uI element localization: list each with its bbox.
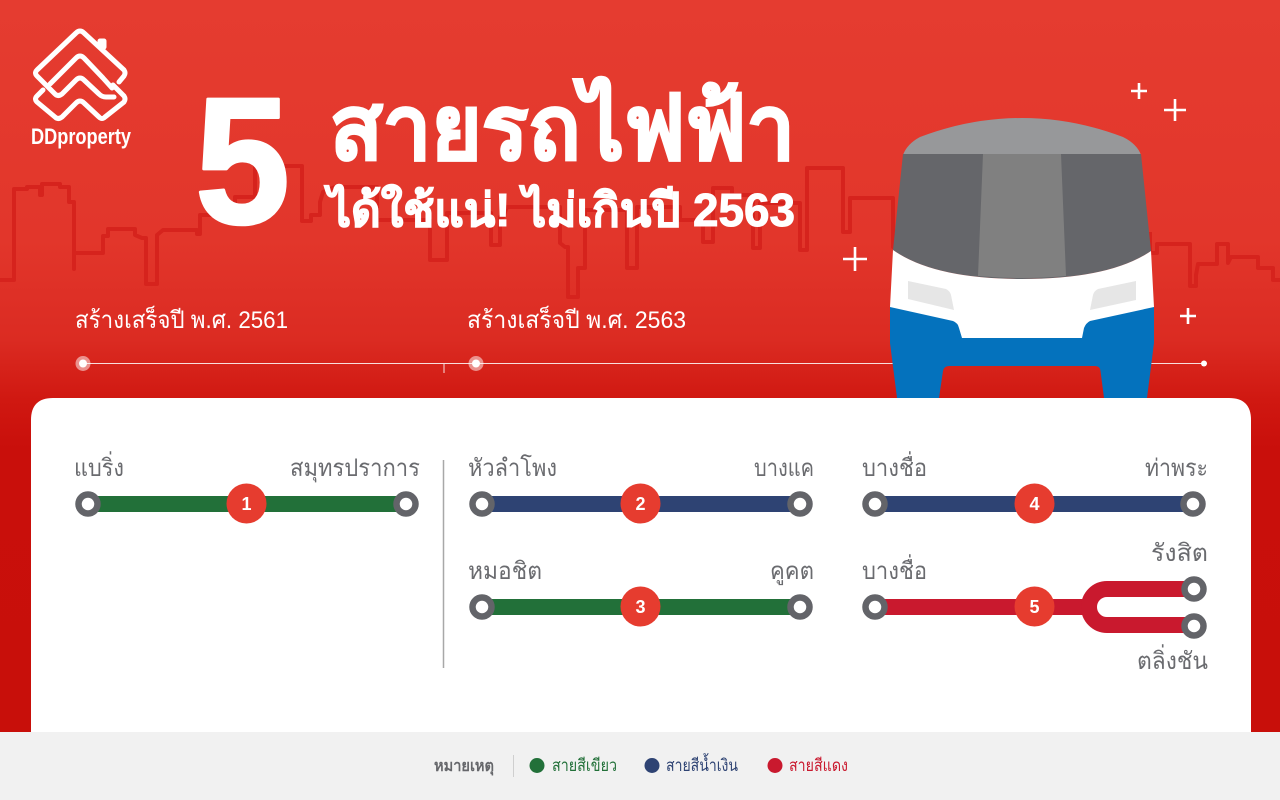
legend title: หมายเหตุ [434, 758, 494, 776]
station labels [862, 451, 1208, 482]
logo mark [36, 31, 125, 118]
timeline [76, 356, 1207, 373]
legend: blue: สายสีน้ำเงิน [666, 753, 738, 775]
station labels: หัวลำโพง [468, 454, 557, 482]
station labels [862, 540, 1208, 675]
end stations [472, 598, 810, 616]
station labels: บางชื่อ [862, 451, 927, 482]
legend bar [0, 732, 1280, 800]
badge 5 [1014, 586, 1054, 626]
line bar [88, 496, 406, 512]
train roof [903, 118, 1141, 155]
train windshield [893, 154, 1151, 279]
label: completed 2563: สร้างเสร็จปี พ.ศ. 2563 [467, 305, 686, 334]
station labels [74, 451, 420, 483]
timeline point 2563 [468, 356, 484, 371]
icon: DDproperty logo [31, 31, 132, 149]
badge 3 [620, 586, 660, 626]
route 3 [468, 558, 814, 626]
badge 1: 1 [241, 494, 252, 514]
legend: red [768, 756, 848, 775]
badge 2: 2 [635, 494, 646, 514]
badge 3: 3 [635, 597, 646, 617]
big number 5: 5 [195, 61, 290, 262]
station labels: คูคต [770, 558, 814, 586]
label: completed 2561: สร้างเสร็จปี พ.ศ. 2561 [75, 305, 288, 334]
route 1 [74, 451, 420, 524]
title line 1: สายรถไฟฟ้า [330, 77, 795, 179]
train blue lower body [890, 307, 1154, 398]
badge 4: 4 [1029, 494, 1040, 514]
route 4 [862, 451, 1208, 524]
timeline end point [1201, 360, 1207, 366]
badge 4 [1014, 484, 1054, 524]
train white body [890, 250, 1154, 340]
line bar [482, 496, 800, 512]
station labels: ท่าพระ [1145, 455, 1208, 482]
divider [442, 460, 444, 668]
station labels: สมุทรปราการ [290, 455, 420, 483]
forked line [875, 589, 1194, 625]
route 2 [468, 454, 814, 524]
station labels: บางชื่อ [862, 554, 927, 585]
station labels: บางแค [754, 455, 814, 482]
legend separator [512, 755, 514, 777]
title [323, 77, 795, 236]
end stations [866, 494, 1202, 514]
windshield centre panel [978, 154, 1066, 278]
logo wordmark: DDproperty [31, 124, 132, 149]
panel: route card [31, 398, 1251, 732]
station labels [468, 558, 814, 586]
badge 5: 5 [1029, 597, 1040, 617]
station labels [468, 454, 814, 482]
station labels: หมอชิต [468, 558, 542, 585]
title line 2: ได้ใช้แน่! ไม่เกินปี 2563 [323, 183, 795, 236]
station labels: ตลิ่งชัน [1137, 644, 1208, 675]
end stations [78, 494, 416, 514]
badge 1 [226, 484, 266, 524]
line bar [875, 496, 1193, 512]
legend: green [530, 756, 617, 775]
city skyline outline [0, 166, 1280, 297]
station labels: รังสิต [1151, 540, 1208, 567]
timeline point 2561 [76, 356, 90, 371]
route 5 [862, 540, 1208, 675]
legend: green: สายสีเขียว [552, 756, 617, 775]
headlight left [908, 281, 954, 310]
icon: skytrain front [890, 118, 1154, 398]
end stations [866, 580, 1204, 636]
legend: blue [644, 753, 738, 775]
line bar [482, 599, 800, 615]
headlight right [1090, 281, 1136, 310]
station labels: แบริ่ง [74, 451, 124, 482]
badge 2 [620, 484, 660, 524]
timeline axis [83, 364, 1204, 373]
legend: red: สายสีแดง [789, 756, 848, 775]
end stations [472, 494, 810, 514]
decorative plus signs [843, 83, 1196, 324]
